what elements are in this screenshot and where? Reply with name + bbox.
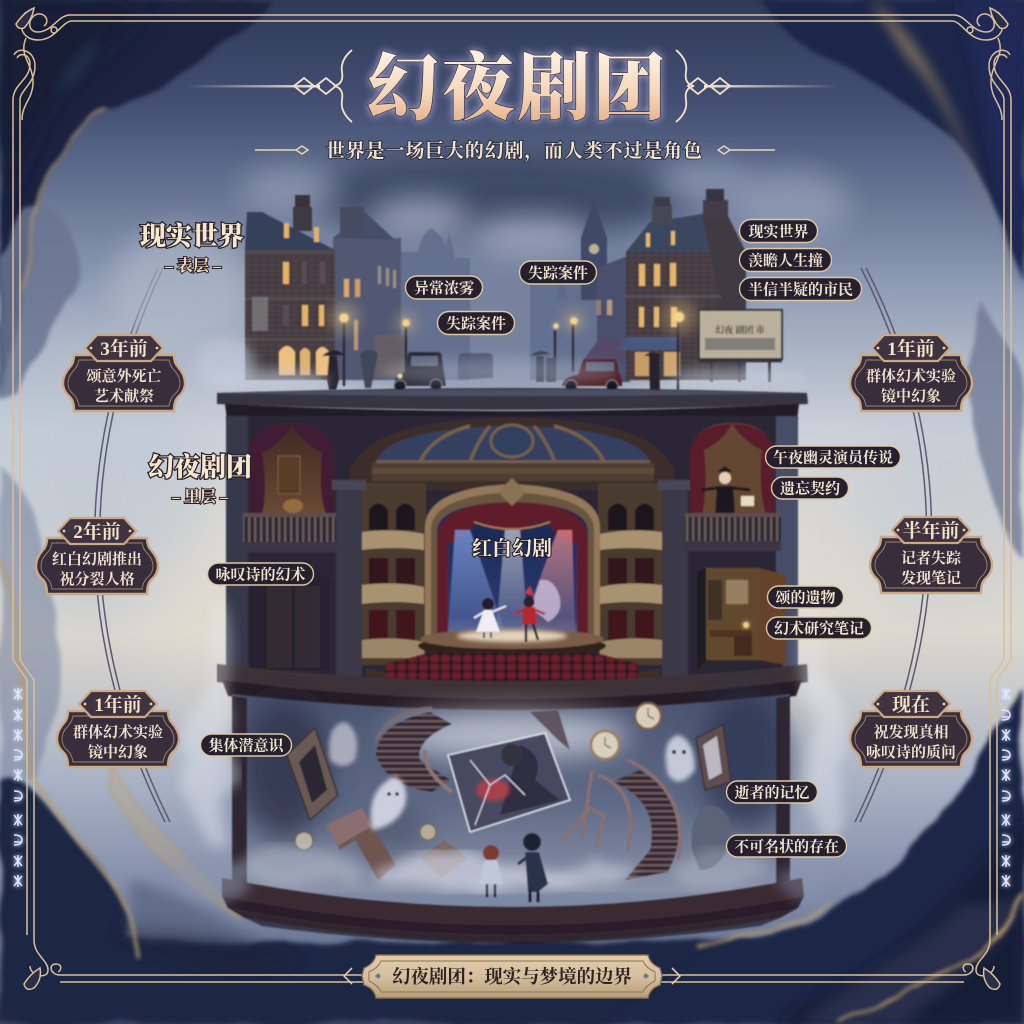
- subtitle: [255, 140, 775, 162]
- stage figures: girl in white, boy in red, ghost: [474, 580, 560, 642]
- upper-right box room with magician: [690, 423, 774, 516]
- left main building: [245, 195, 335, 380]
- pills: dreamscape labels: 不可名状的存在: [734, 838, 839, 856]
- realm: lower dreamscape: [232, 690, 790, 902]
- timeline card: present: 现在: [892, 694, 930, 716]
- timeline arc: right: [855, 268, 932, 822]
- spiral stair right: [598, 760, 680, 880]
- timeline card: half a year ago: 半年前: [902, 519, 960, 542]
- pills: town labels: [406, 220, 862, 334]
- billboard: [699, 310, 782, 382]
- spotlights: [448, 530, 575, 632]
- floating architecture fragments: [326, 710, 570, 880]
- timeline card: 2 years ago: 红白幻剧推出: [52, 550, 142, 568]
- pills: theatre labels: 午夜幽灵演员传说: [773, 448, 893, 466]
- ghosts and masks: [329, 722, 731, 870]
- theatre: rooftop slab: [217, 388, 808, 420]
- shattered photo: [448, 733, 570, 832]
- realm heading: reality: 现实世界: [140, 221, 244, 251]
- lower-right study room: [697, 563, 786, 670]
- timeline card: 3 years ago: 3年前: [100, 337, 148, 360]
- proscenium arch: [425, 478, 600, 645]
- theatre base steps: [222, 878, 804, 943]
- floating frames: [287, 725, 731, 848]
- timeline card: present: 咏叹诗的质问: [866, 743, 956, 761]
- upper-right balcony: [685, 513, 781, 551]
- pills: town labels: 半信半疑的市民: [748, 280, 853, 298]
- timeline arc: left: [95, 268, 170, 822]
- clock tower: [556, 200, 607, 300]
- realm heading: troupe: – 里层 –: [171, 488, 229, 506]
- title ornament lines: [185, 50, 839, 122]
- children seen from behind: [479, 833, 548, 902]
- timeline card: 1 year ago (right): [850, 335, 972, 411]
- runes: left column: [14, 688, 22, 887]
- audience seats: [366, 653, 660, 690]
- pills: theatre labels: 幻术研究笔记: [774, 620, 864, 638]
- distant skyline: [400, 228, 600, 380]
- bottom banner: 幻夜剧团：现实与梦境的边界: [392, 966, 632, 988]
- lower floor slab: [217, 664, 808, 713]
- lower-left door: [250, 564, 330, 670]
- pills: theatre labels: 咏叹诗的幻术: [215, 566, 306, 584]
- timeline card: 1 year ago (right): 镜中幻象: [881, 387, 941, 405]
- pills: town labels: 现实世界: [748, 222, 809, 240]
- runes: right column: [1002, 688, 1010, 887]
- street lamps: [328, 299, 697, 390]
- realm: town street scene: [195, 189, 810, 392]
- pills: theatre labels: 颂的遗物: [775, 588, 836, 606]
- upper-left box room: [250, 423, 334, 515]
- realm heading: troupe: 幻夜剧团: [148, 452, 252, 482]
- stage platform: [418, 629, 606, 658]
- columns: [332, 480, 692, 679]
- title: 幻夜剧团: [366, 48, 666, 129]
- pedestrians with umbrellas: [322, 350, 662, 392]
- dome ceiling: [350, 418, 674, 490]
- stage title: 红白幻剧: [472, 537, 552, 560]
- right opera boxes: [598, 483, 664, 665]
- timeline card: half a year ago: [870, 517, 992, 593]
- timeline card: 1 year ago (right): 群体幻术实验: [866, 367, 956, 385]
- pills: dreamscape labels: [200, 734, 846, 857]
- realm heading: reality: [140, 221, 244, 275]
- timeline card: 1 year ago (right): 1年前: [887, 337, 935, 360]
- storm clouds behind town: [110, 153, 850, 390]
- timeline card: 2 years ago: [36, 518, 158, 594]
- left opera boxes: [360, 483, 426, 665]
- timeline card: 3 years ago: 艺术献祭: [94, 387, 154, 405]
- pills: town labels: 失踪案件: [446, 314, 506, 332]
- upper-left balcony: [243, 513, 339, 552]
- pills: theatre labels: [208, 446, 900, 639]
- timeline card: present: [850, 691, 972, 767]
- realm heading: reality: – 表层 –: [164, 256, 222, 275]
- cars: [394, 352, 622, 392]
- spiral stair left: [376, 708, 452, 792]
- timeline card: 1 year ago (left): 群体幻术实验: [73, 723, 163, 741]
- subtitle: 世界是一场巨大的幻剧，而人类不过是角色: [326, 140, 702, 162]
- side smoke around theatre: [179, 600, 849, 902]
- pills: town labels: 羡瞻人生撞: [748, 252, 823, 270]
- pills: dreamscape labels: 集体潜意识: [208, 736, 285, 754]
- right main building: [626, 189, 746, 380]
- awning: [617, 337, 680, 350]
- billboard: 幻夜 剧团 市: [715, 324, 765, 335]
- realm heading: troupe: [148, 452, 252, 506]
- pills: town labels: 失踪案件: [528, 264, 588, 282]
- left second building: [333, 207, 407, 380]
- floating clocks: [295, 703, 661, 850]
- pills: dreamscape labels: 逝者的记忆: [734, 784, 810, 802]
- timeline card: 1 year ago (left): [57, 691, 179, 767]
- right second building: [583, 255, 630, 382]
- timeline card: 2 years ago: 2年前: [73, 520, 121, 543]
- timeline card: 3 years ago: 颂意外死亡: [86, 367, 162, 385]
- bottom banner: [344, 955, 680, 998]
- timeline card: 2 years ago: 祝分裂人格: [59, 570, 135, 588]
- timeline card: 1 year ago (left): 镜中幻象: [88, 743, 148, 761]
- realm: middle theatre level: [226, 416, 798, 690]
- timeline card: 1 year ago (left): 1年前: [94, 693, 142, 716]
- timeline card: half a year ago: 记者失踪: [901, 549, 962, 567]
- timeline card: 3 years ago: [63, 335, 185, 411]
- pills: theatre labels: 遗忘契约: [780, 480, 840, 498]
- street fog: [195, 339, 810, 391]
- timeline card: present: 祝发现真相: [873, 723, 949, 741]
- pills: town labels: 异常浓雾: [414, 279, 474, 297]
- rising fog: [240, 850, 770, 890]
- timeline card: half a year ago: 发现笔记: [901, 569, 961, 587]
